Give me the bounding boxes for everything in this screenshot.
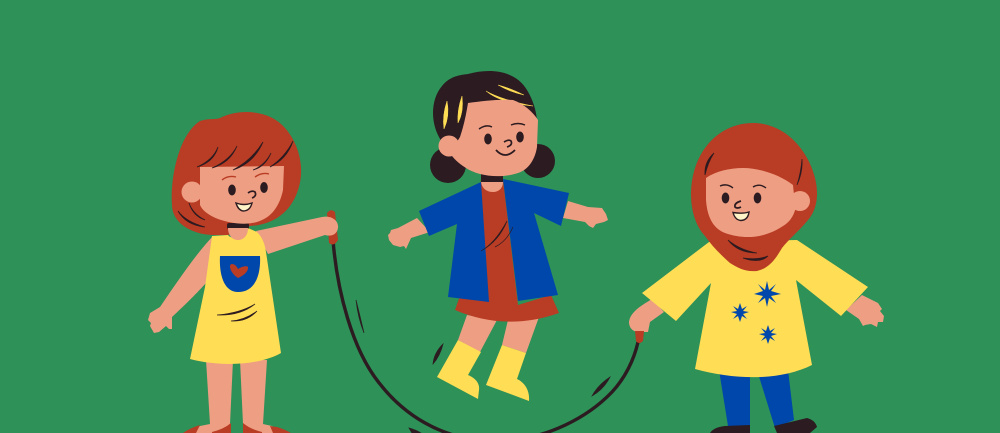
middle girl ear [438, 136, 460, 156]
right girl arms [629, 295, 884, 332]
middle girl hair highlights [443, 85, 533, 129]
right girl ear [790, 191, 810, 211]
left girl nose [248, 191, 256, 198]
left girl eyes [228, 182, 268, 196]
jump rope [333, 240, 638, 433]
middle girl neck [481, 182, 503, 192]
right girl shirt [642, 240, 868, 377]
left girl neck band [227, 223, 249, 229]
child: middle girl jumping [388, 71, 608, 401]
right girl scarf folds [705, 153, 802, 261]
left girl eyebrows [222, 173, 269, 180]
left girl legs [190, 360, 283, 433]
left girl mouth [236, 203, 252, 211]
right girl rope handle [635, 331, 644, 343]
middle girl eyes [484, 132, 524, 144]
middle girl face [450, 100, 538, 176]
right girl hijab [691, 123, 817, 271]
left girl rope handle [327, 210, 338, 244]
left girl ear [182, 182, 202, 202]
child: right girl in hijab [629, 123, 884, 433]
motion marks around the rope [356, 300, 610, 433]
right girl mouth [733, 212, 749, 220]
left girl sandals [183, 423, 291, 433]
middle girl hair [433, 71, 537, 145]
left girl hair [172, 112, 301, 235]
middle girl buns [430, 147, 466, 183]
middle girl jacket left [419, 182, 489, 302]
left girl pocket [220, 256, 260, 292]
left girl neck [228, 228, 248, 240]
child: left girl in yellow dress [148, 112, 338, 433]
right girl stars [731, 281, 781, 344]
middle girl neck band [481, 174, 503, 182]
middle girl arms [388, 201, 608, 249]
right girl shoes [710, 418, 817, 433]
middle girl dress [455, 180, 559, 322]
middle girl boots [437, 340, 529, 401]
middle girl jacket right [503, 179, 569, 301]
middle girl smile [496, 150, 515, 155]
middle girl nose [504, 140, 512, 147]
left girl heart [230, 264, 248, 278]
middle girl dress folds [481, 221, 513, 251]
left girl dress folds [217, 304, 257, 321]
right girl face [706, 168, 797, 237]
right girl nose [735, 201, 741, 208]
middle girl eyebrows [479, 124, 525, 129]
right girl eyes [722, 192, 761, 204]
right girl eyebrows [720, 185, 766, 188]
left girl dress [190, 228, 281, 364]
left girl arms [148, 217, 338, 333]
right girl trousers [719, 370, 794, 428]
left girl face [200, 166, 284, 224]
middle girl legs [458, 315, 539, 353]
left girl hair strands [178, 141, 293, 227]
